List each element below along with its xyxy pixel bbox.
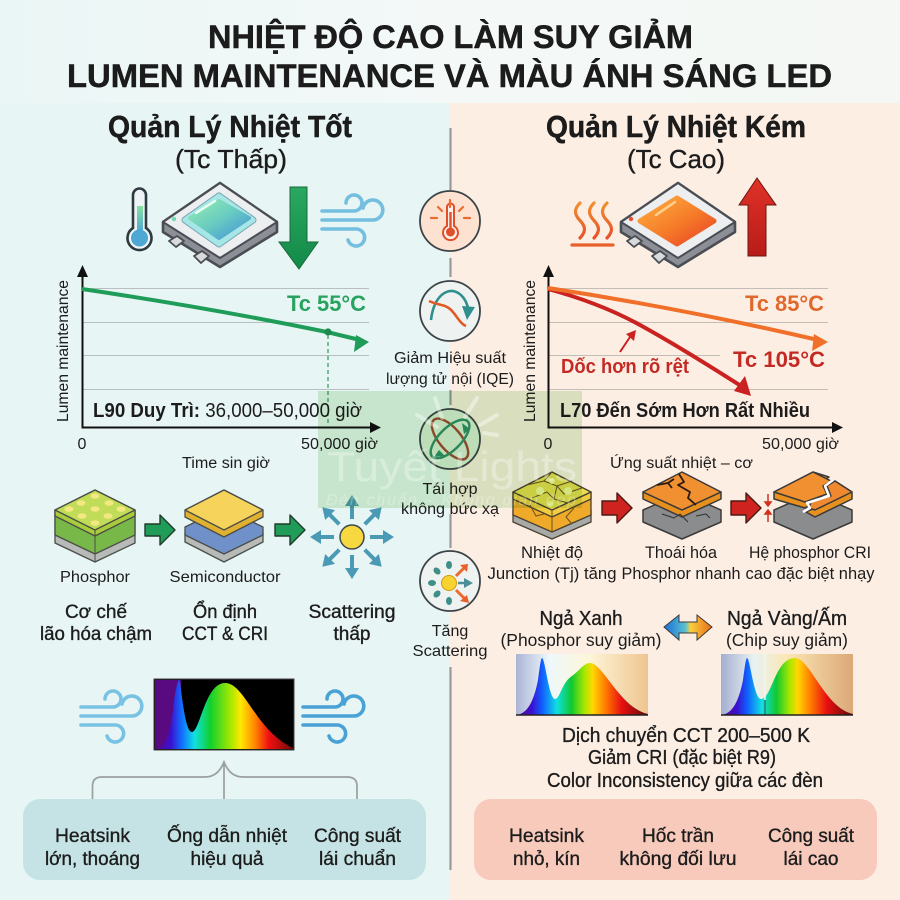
item: standard drive power: lái chuẩn: [319, 848, 396, 870]
item: heat pipe: hiệu quả: [190, 848, 264, 870]
label L90: L90 Duy Trì: 36,000–50,000 giờ: [93, 399, 362, 422]
watermark: Đèn chuẩn – Không gian đẹp: [326, 491, 576, 509]
background: left panel: [0, 103, 450, 900]
chart: spectrum chip decay: [721, 654, 853, 715]
item: small heatsink: [509, 825, 584, 870]
centre divider: [449, 128, 452, 870]
icon: low scattering sun: [310, 495, 394, 579]
background: header band: [0, 0, 900, 103]
item: high drive power: [768, 825, 855, 870]
item: ceiling cavity: không đối lưu: [620, 848, 736, 870]
title: [67, 19, 832, 94]
icon: heat plate: [572, 243, 613, 247]
text: warm shift: Ngả Vàng/Ấm: [727, 607, 847, 630]
centre icon: hot thermometer: [420, 191, 480, 251]
icon: red arrow up: [739, 178, 776, 256]
chart: right lumen maintenance: Lumen maintenance: [522, 280, 539, 422]
icon: wind blue: [303, 691, 364, 742]
chart: left lumen maintenance: 50,000 giờ: [301, 436, 379, 453]
label Tc 55: Tc 55°C: [287, 291, 366, 316]
text: stable CCT CRI: Ổn định: [193, 601, 257, 623]
chart: right lumen maintenance: Ứng suất nhiệt – cơ: [610, 455, 753, 472]
text: stable CCT CRI: CCT & CRI: [182, 624, 268, 645]
chart: healthy spectrum: [154, 679, 294, 750]
heading: good thermal management: (Tc Thấp): [175, 144, 287, 174]
axis labels: 0: [78, 436, 87, 453]
text: phosphor degradation: Phosphor nhanh: [622, 564, 740, 583]
label: Semiconductor: Semiconductor: [170, 569, 281, 586]
label L70: L70 Đến Sớm Hơn Rất Nhiều: [560, 399, 810, 422]
axes: [82, 272, 374, 428]
centre icon: recombination: [420, 409, 480, 469]
text: low scattering: thấp: [334, 624, 370, 645]
text: consequences: Color Inconsistency giữa các đèn: [547, 770, 823, 792]
text: junction temperature: Nhiệt độ: [521, 543, 583, 562]
chart: left lumen maintenance: Lumen maintenance: [55, 280, 72, 422]
chart: left lumen maintenance: Time sin giờ: [182, 455, 270, 472]
label Tc 85: Tc 85°C: [745, 291, 824, 316]
arrow: [731, 493, 761, 523]
curve Tc 105: [548, 289, 741, 386]
text: blue shift: (Phosphor suy giảm): [500, 630, 662, 650]
text: low scattering: [308, 602, 396, 645]
axes: [548, 272, 836, 428]
text: sensitive phosphor: [746, 543, 875, 583]
centre label: scattering: Scattering: [412, 643, 488, 660]
arrow: [275, 515, 305, 545]
grid lines: [548, 288, 828, 390]
centre icon: scattering: [420, 551, 480, 611]
heading: good thermal management: [108, 109, 352, 174]
text: sensitive phosphor: cao đặc biệt nhạy: [746, 564, 875, 583]
icon: double arrow: [664, 615, 712, 640]
text: consequences: Dịch chuyển CCT 200–500 K: [562, 725, 811, 747]
icon: hot LED chip: [621, 183, 735, 267]
curve Tc 85: [548, 288, 818, 340]
text: junction temperature: Junction (Tj) tăng: [488, 564, 616, 583]
icon: green arrow down: [279, 187, 318, 269]
text: stable CCT CRI: [182, 601, 268, 645]
label: Phosphor: Phosphor: [60, 569, 131, 586]
text: low scattering: Scattering: [308, 602, 396, 623]
curve Tc 55: [82, 289, 360, 340]
item: ceiling cavity: [620, 825, 736, 870]
label Tc 105: Tc 105°C: [733, 347, 825, 372]
annotation arrow: [620, 334, 632, 352]
item: small heatsink: Heatsink: [509, 825, 584, 847]
text: consequences: [547, 725, 823, 792]
item: heat pipe: [167, 823, 288, 870]
centre label: recombination: không bức xạ: [401, 501, 499, 518]
text: blue shift: Ngả Xanh: [540, 608, 622, 630]
centre label: recombination: [401, 481, 499, 518]
chart: right lumen maintenance: [522, 265, 843, 472]
icon: cracked junction stack: [513, 472, 591, 539]
text: slow aging: [40, 602, 152, 645]
heading: poor thermal management: Quản Lý Nhiệt Kém: [546, 109, 806, 144]
text: junction temperature: [488, 543, 616, 583]
icon: cool LED chip: [163, 183, 277, 267]
bracket: [92, 762, 357, 799]
label steeper: Dốc hơn rõ rệt: [561, 355, 689, 378]
item: standard drive power: [314, 825, 402, 870]
title: NHIỆT ĐỘ CAO LÀM SUY GIẢM: [208, 19, 693, 55]
arrow: [145, 515, 175, 545]
icon: degraded phosphor stack: [643, 472, 721, 539]
text: consequences: Giảm CRI (đặc biệt R9): [588, 747, 776, 769]
text: warm shift: (Chip suy giảm): [726, 630, 848, 650]
text: sensitive phosphor: Hệ phosphor CRI: [749, 543, 871, 562]
icon: compression arrows: [765, 494, 771, 522]
axis arrows: [77, 265, 381, 433]
text: warm shift: [726, 607, 848, 650]
item: large heatsink: Heatsink: [55, 825, 130, 847]
item: ceiling cavity: Hốc trần: [642, 825, 714, 847]
heading: poor thermal management: [546, 109, 806, 174]
heading: poor thermal management: (Tc Cao): [627, 144, 725, 174]
icon: thermometer cool: [128, 189, 152, 250]
item: high drive power: lái cao: [784, 848, 839, 870]
chart: right lumen maintenance: 50,000 giờ: [762, 436, 840, 453]
chart: spectrum phosphor decay: [516, 654, 648, 715]
centre label: IQE: [386, 350, 514, 388]
axis labels: 0: [544, 436, 553, 453]
text: slow aging: lão hóa chậm: [40, 624, 152, 645]
text: slow aging: Cơ chế: [65, 602, 127, 623]
centre label: IQE: Giảm Hiệu suất: [394, 350, 507, 367]
item: small heatsink: nhỏ, kín: [513, 848, 580, 870]
grid lines: [82, 288, 369, 390]
watermark: [318, 391, 582, 509]
icon: heat waves: [576, 203, 612, 238]
text: phosphor degradation: Thoái hóa: [645, 543, 718, 562]
title: LUMEN MAINTENANCE VÀ MÀU ÁNH SÁNG LED: [67, 58, 832, 94]
panel: good thermal causes: [23, 799, 426, 880]
text: phosphor degradation: [622, 543, 740, 583]
item: high drive power: Công suất: [768, 825, 855, 847]
panel: poor thermal causes: [474, 799, 877, 880]
centre label: scattering: Tăng: [432, 623, 468, 640]
centre label: recombination: Tái hợp: [423, 481, 478, 498]
arrow: [602, 493, 632, 523]
item: heat pipe: Ống dẫn nhiệt: [167, 823, 288, 847]
item: large heatsink: [45, 825, 140, 870]
icon: wind light blue: [81, 691, 142, 742]
50000 marker: [324, 328, 332, 336]
watermark: Tuyết Lights: [327, 443, 577, 490]
centre icon: IQE curve: [420, 281, 480, 341]
icon: delaminated CRI stack: [774, 472, 852, 539]
text: blue shift: [500, 608, 662, 650]
axis arrows: [543, 265, 843, 433]
item: standard drive power: Công suất: [314, 825, 402, 847]
icon: semiconductor layer stack: [185, 490, 263, 562]
icon: wind light: [322, 195, 383, 246]
item: large heatsink: lớn, thoáng: [45, 848, 140, 870]
heading: good thermal management: Quản Lý Nhiệt Tốt: [108, 109, 352, 144]
background: right panel: [450, 103, 900, 900]
icon: phosphor layer stack: [55, 490, 135, 562]
centre label: IQE: lượng tử nội (IQE): [386, 371, 514, 388]
chart: left lumen maintenance: [55, 265, 381, 472]
centre label: scattering: [412, 623, 488, 660]
